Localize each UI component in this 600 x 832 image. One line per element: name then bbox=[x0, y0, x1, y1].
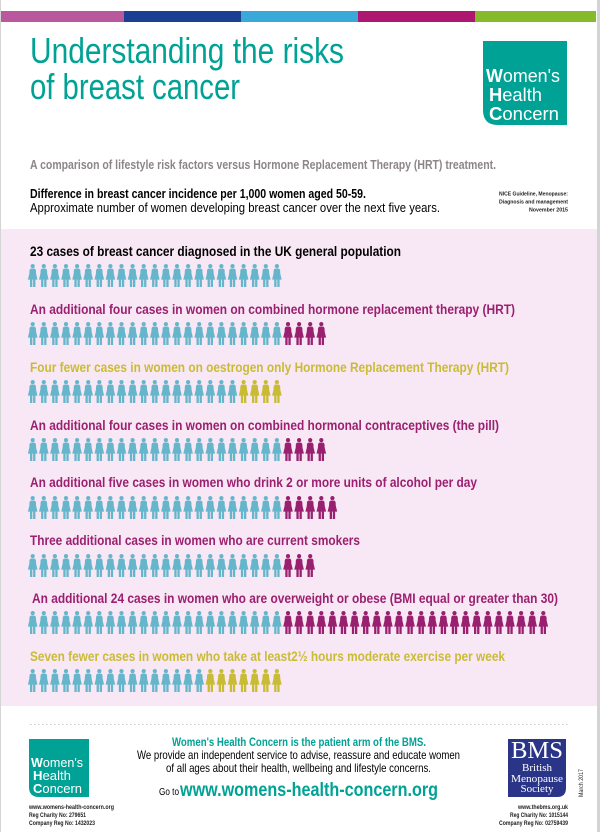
date note: March 2017 bbox=[578, 769, 585, 797]
footer logo: British Menopause Society: BMS bbox=[511, 738, 563, 764]
intro text: Approximate number of women developing breast cancer over the next five years. bbox=[30, 201, 440, 215]
row 8 label: Seven fewer cases in women who take at least2½ hours moderate exercise per week bbox=[30, 649, 505, 664]
source note bbox=[499, 192, 568, 214]
footer right contact details: Reg Charity No: 1015144 bbox=[510, 813, 569, 819]
title: Understanding the risks bbox=[30, 30, 344, 71]
row 1 figures bbox=[28, 264, 282, 287]
website call to action: Go to bbox=[159, 787, 179, 798]
subtitle: A comparison of lifestyle risk factors versus Hormone Replacement Therapy (HRT) treatment. bbox=[30, 158, 496, 172]
footer logo: British Menopause Society bbox=[508, 738, 566, 797]
panel: risk comparison bbox=[1, 229, 597, 706]
row 6 figures bbox=[28, 554, 315, 577]
colour bar bbox=[1, 11, 596, 22]
row 2 label: An additional four cases in women on combined hormone replacement therapy (HRT) bbox=[30, 302, 515, 317]
footer left contact details: Reg Charity No: 279651 bbox=[29, 813, 87, 819]
footer logo: British Menopause Society: Menopause bbox=[511, 774, 563, 785]
logo: Women's Health Concern: Concern bbox=[489, 104, 559, 124]
logo: Women's Health Concern bbox=[483, 41, 567, 125]
row 1 label: 23 cases of breast cancer diagnosed in the UK general population bbox=[30, 244, 401, 259]
row 4 figures bbox=[28, 438, 326, 461]
row 7 figures bbox=[28, 611, 548, 634]
row 6 label: Three additional cases in women who are current smokers bbox=[30, 533, 360, 548]
footer right contact details bbox=[499, 805, 569, 827]
footer message bbox=[137, 735, 460, 775]
footer logo: Women's Health Concern: Women's bbox=[31, 756, 83, 770]
source note: NICE Guideline, Menopause: bbox=[499, 192, 568, 198]
website call to action: www.womens-health-concern.org bbox=[179, 780, 438, 801]
row 5 label: An additional five cases in women who drink 2 or more units of alcohol per day bbox=[30, 475, 477, 490]
intro text bbox=[30, 187, 440, 215]
footer logo: British Menopause Society: Society bbox=[520, 784, 554, 795]
footer message: We provide an independent service to advise, reassure and educate women bbox=[137, 748, 460, 762]
row 2 figures bbox=[28, 322, 326, 345]
logo: Women's Health Concern: Health bbox=[489, 85, 542, 105]
footer left contact details: www.womens-health-concern.org bbox=[28, 805, 114, 811]
row 3 figures bbox=[28, 380, 282, 403]
footer logo: Women's Health Concern: Concern bbox=[33, 782, 82, 796]
footer message: of all ages about their health, wellbeing and lifestyle concerns. bbox=[166, 761, 431, 775]
footer right contact details: Company Reg No: 02759439 bbox=[499, 821, 569, 827]
footer logo: Women's Health Concern: Health bbox=[33, 769, 71, 783]
footer logo: Women's Health Concern bbox=[29, 739, 89, 797]
footer right contact details: www.thebms.org.uk bbox=[517, 805, 569, 811]
row 3 label: Four fewer cases in women on oestrogen only Hormone Replacement Therapy (HRT) bbox=[30, 360, 509, 375]
row 4 label: An additional four cases in women on combined hormonal contraceptives (the pill) bbox=[30, 418, 499, 433]
row 8 figures bbox=[28, 669, 282, 692]
source note: Diagnosis and management bbox=[499, 200, 568, 206]
footer left contact details: Company Reg No: 1432023 bbox=[29, 821, 96, 827]
footer left contact details bbox=[28, 805, 114, 827]
title bbox=[30, 30, 344, 107]
row 5 figures bbox=[28, 496, 337, 519]
intro text: Difference in breast cancer incidence per 1,000 women aged 50-59. bbox=[30, 187, 366, 201]
footer logo: British Menopause Society: British bbox=[522, 763, 553, 774]
title: of breast cancer bbox=[30, 66, 240, 107]
source note: November 2015 bbox=[529, 208, 568, 214]
logo: Women's Health Concern: Women's bbox=[486, 66, 560, 86]
footer message: Women's Health Concern is the patient arm of the BMS. bbox=[172, 735, 426, 749]
